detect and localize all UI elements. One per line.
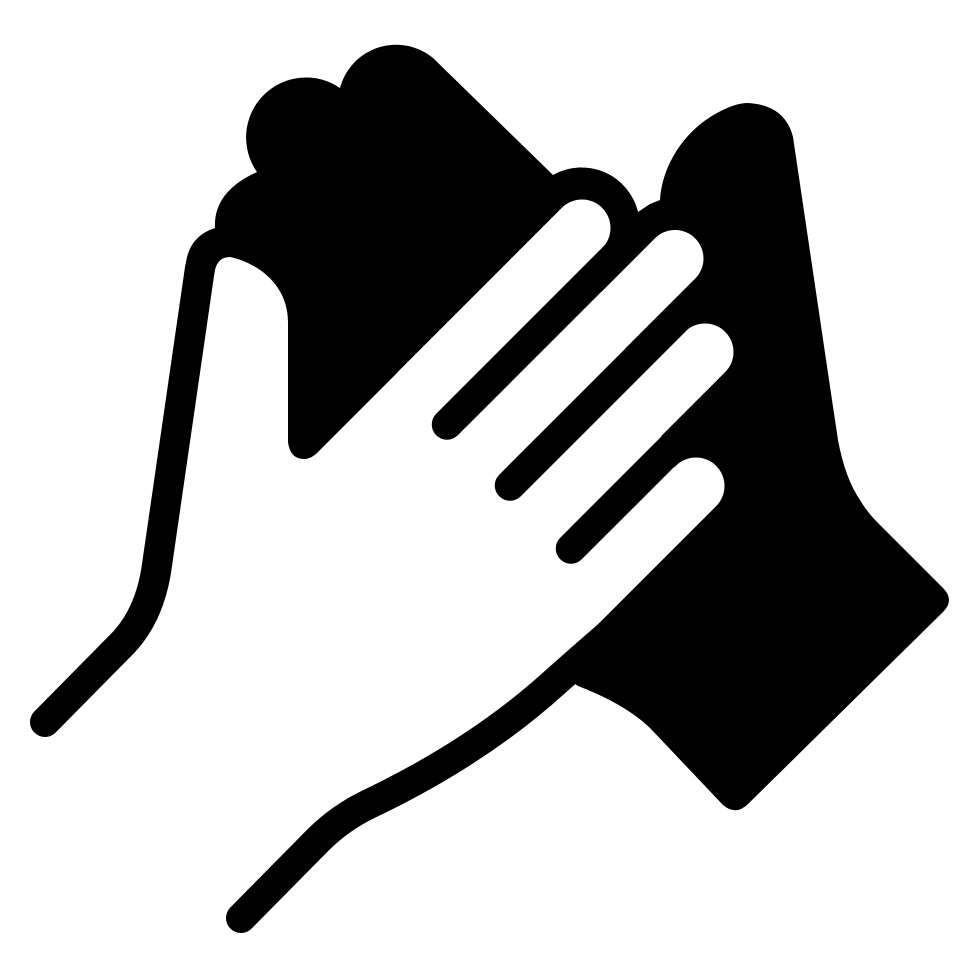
gaps between fingers <box>447 232 725 548</box>
front hand outline: thumb side <box>45 268 200 722</box>
front hand palm and thumb <box>45 205 690 918</box>
front hand outline: little finger side <box>241 631 640 918</box>
front hand fingers <box>420 228 705 622</box>
back hand silhouette <box>186 45 949 810</box>
